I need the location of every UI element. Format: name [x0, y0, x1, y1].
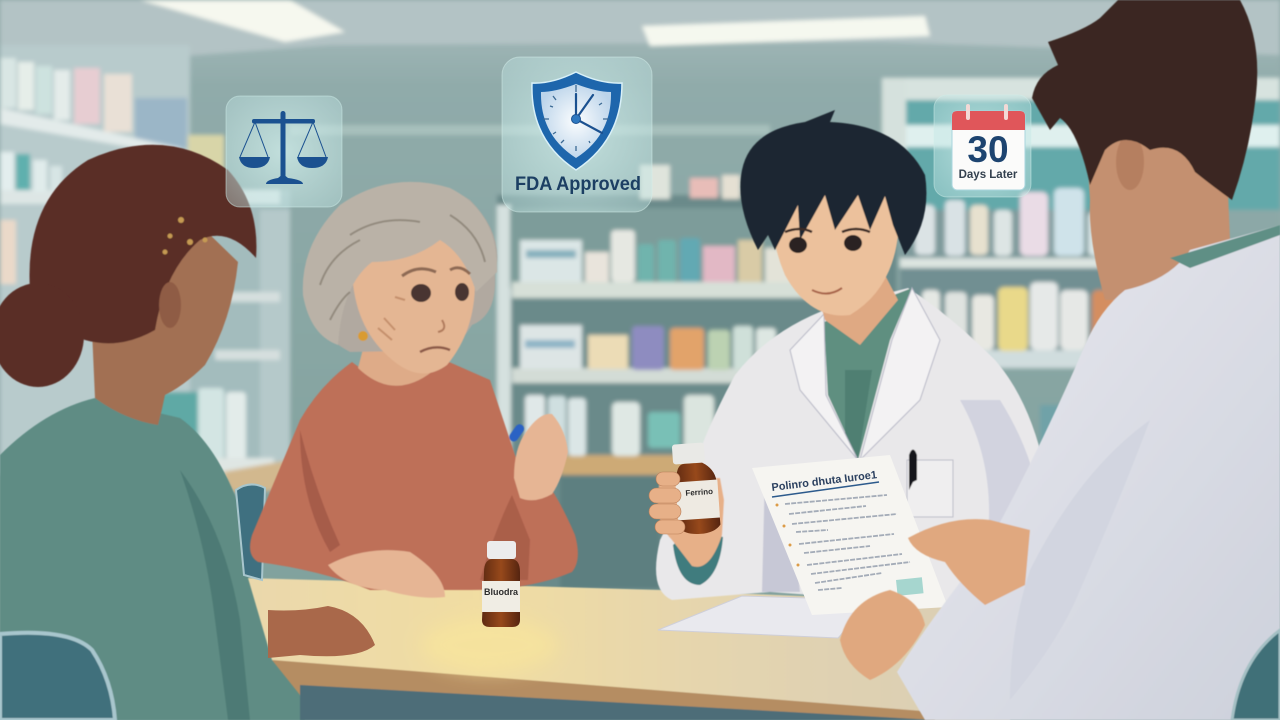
calendar header	[952, 111, 1025, 130]
table	[248, 578, 1010, 720]
person: pharmacist	[656, 110, 1053, 605]
coat pocket and pen	[907, 460, 953, 517]
teal top	[0, 398, 305, 720]
neck	[358, 320, 447, 386]
calendar rings	[968, 106, 1006, 118]
eyes and brows	[378, 268, 470, 352]
face	[352, 218, 475, 374]
neck and face	[92, 230, 238, 425]
resting hand	[328, 550, 445, 598]
white coat	[897, 225, 1280, 720]
left shelving unit	[0, 45, 290, 492]
ceiling	[0, 0, 1280, 70]
scale beam and pole	[239, 111, 328, 184]
black hair	[740, 110, 926, 255]
right chair	[1232, 630, 1280, 720]
clock ticks	[543, 85, 609, 151]
clock face	[541, 84, 611, 158]
person: woman seen from behind at left	[0, 145, 305, 720]
hair back	[303, 182, 497, 352]
hair front	[303, 182, 497, 345]
pill	[508, 423, 526, 443]
pill bottle on table	[482, 541, 520, 627]
calendar page	[952, 111, 1025, 190]
hand on paper upper	[908, 519, 1030, 605]
left pan	[239, 157, 270, 168]
palm	[658, 478, 724, 567]
person: elderly woman	[250, 182, 578, 598]
ear	[1116, 134, 1144, 190]
sleeve cuff	[673, 530, 723, 585]
pill bottle in pharmacist's hand	[672, 442, 721, 535]
handout title: Polinro dhuta Iuroe1	[771, 469, 878, 494]
hair bun	[0, 283, 84, 387]
lower paper on table	[658, 596, 872, 638]
arm of left woman on table	[268, 606, 375, 658]
face	[772, 163, 899, 316]
icon: balance scale panel	[226, 96, 342, 207]
ceiling light left	[140, 0, 345, 42]
fingers around bottle	[649, 472, 685, 534]
dark hair	[1032, 0, 1257, 200]
shield	[532, 72, 622, 170]
handout document	[752, 455, 948, 615]
hand on paper lower	[840, 590, 925, 680]
lapels	[790, 314, 858, 460]
icon: FDA approved shield panel	[502, 57, 652, 212]
number 30: 30	[967, 129, 1009, 170]
center shelving unit	[497, 165, 897, 590]
eyes	[789, 237, 807, 253]
hair	[29, 145, 256, 343]
right shelving unit	[882, 78, 1280, 465]
person: customer at right seen from behind	[840, 0, 1280, 720]
brows	[785, 229, 870, 232]
ceiling light right	[642, 16, 930, 46]
teal shirt	[824, 288, 912, 460]
ear	[159, 282, 181, 328]
days later label: Days Later	[959, 169, 1018, 181]
right pan	[297, 157, 328, 168]
center wall band	[290, 125, 770, 135]
terracotta sweater	[250, 358, 578, 590]
smile	[812, 288, 842, 294]
hair pin sparkles	[162, 217, 208, 254]
neck	[815, 275, 898, 345]
hair wisps	[320, 215, 485, 320]
handout small table	[896, 577, 924, 596]
pill bottle on table: Bluodra	[484, 587, 519, 597]
chair behind elderly woman	[236, 484, 265, 580]
clock hands	[576, 94, 602, 133]
earring	[358, 331, 368, 341]
left chair	[0, 633, 115, 720]
icon: calendar 30 days later panel	[934, 95, 1031, 197]
white coat	[656, 288, 1053, 605]
handout bullets	[776, 504, 800, 566]
raised hand	[514, 414, 568, 500]
FDA Approved label: FDA Approved	[515, 174, 641, 195]
neck and head skin	[1085, 120, 1230, 300]
pill bottle in pharmacist's hand: Ferrino	[685, 487, 713, 498]
